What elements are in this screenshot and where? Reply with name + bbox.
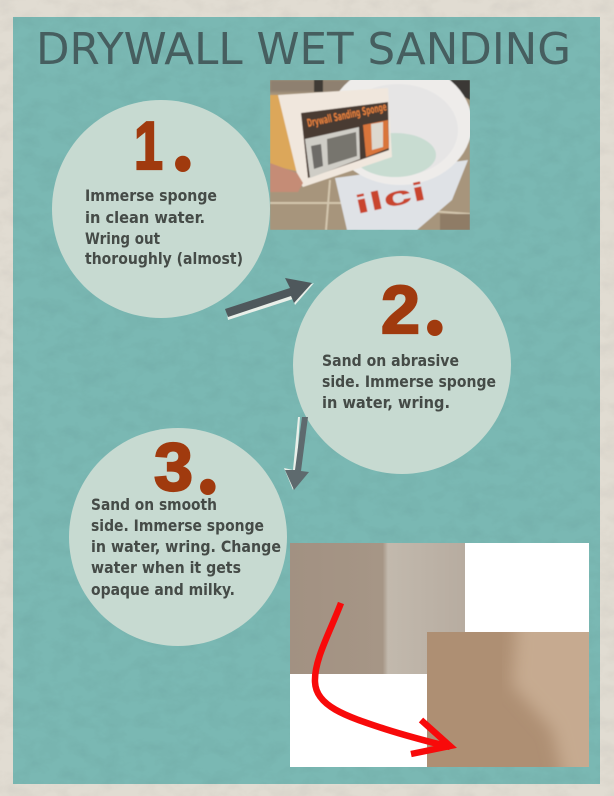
water [354,133,436,177]
arrow: step 1 to step 2 [225,278,314,320]
step 1 number: 1 [134,108,163,184]
step 3 circle [69,396,287,646]
bucket rim [339,80,470,185]
step 3 number [154,396,222,519]
step 2 number: 2 [381,272,420,348]
sponge white face [278,88,392,187]
step 3 number: . [194,396,222,519]
sponge label text: Drywall Sanding Sponge [306,100,388,130]
step 2 text: side. Immerse sponge [322,372,496,391]
sponge label [301,102,389,178]
title: DRYWALL WET SANDING [36,24,571,75]
arrow: step 2 to step 3 [284,417,309,490]
step 2 number: . [421,237,449,360]
step 3 text: Sand on smooth [91,495,217,514]
step 2 text [322,351,496,412]
white backing [290,543,589,767]
sponge label barcode panel [305,127,360,178]
step 2 number [381,237,449,360]
bucket body [335,160,468,230]
step 1 number: . [169,73,197,196]
step 1 circle [52,73,270,318]
step 1 text [85,186,243,268]
before and after photo collage [290,543,589,767]
bucket inner shadow [338,84,458,176]
step 1 number [134,73,197,196]
step 3 number: 3 [154,429,193,505]
sponge yellow side [270,94,296,172]
step 1 text: Wring out [85,229,160,248]
step 3 text: water when it gets [91,558,241,577]
photo: before wall [290,543,465,674]
step 3 text: opaque and milky. [91,580,235,599]
step 1 text: thoroughly (almost) [85,249,243,268]
photo: after wall [427,632,589,767]
step 1 text: Immerse sponge [85,186,217,205]
step 2 text: Sand on abrasive [322,351,459,370]
step 3 text: in water, wring. Change [91,537,281,556]
red curved arrow [315,603,450,754]
step 2 text: in water, wring. [322,393,450,412]
thumb [270,163,303,192]
bucket logo: ilci [352,176,429,220]
step 2 circle [293,237,511,474]
step 3 text: side. Immerse sponge [91,516,264,535]
sponge orange box [363,120,389,157]
step 1 text: in clean water. [85,208,205,227]
photo: sponge and bucket [270,80,470,230]
step 3 text [91,495,281,599]
